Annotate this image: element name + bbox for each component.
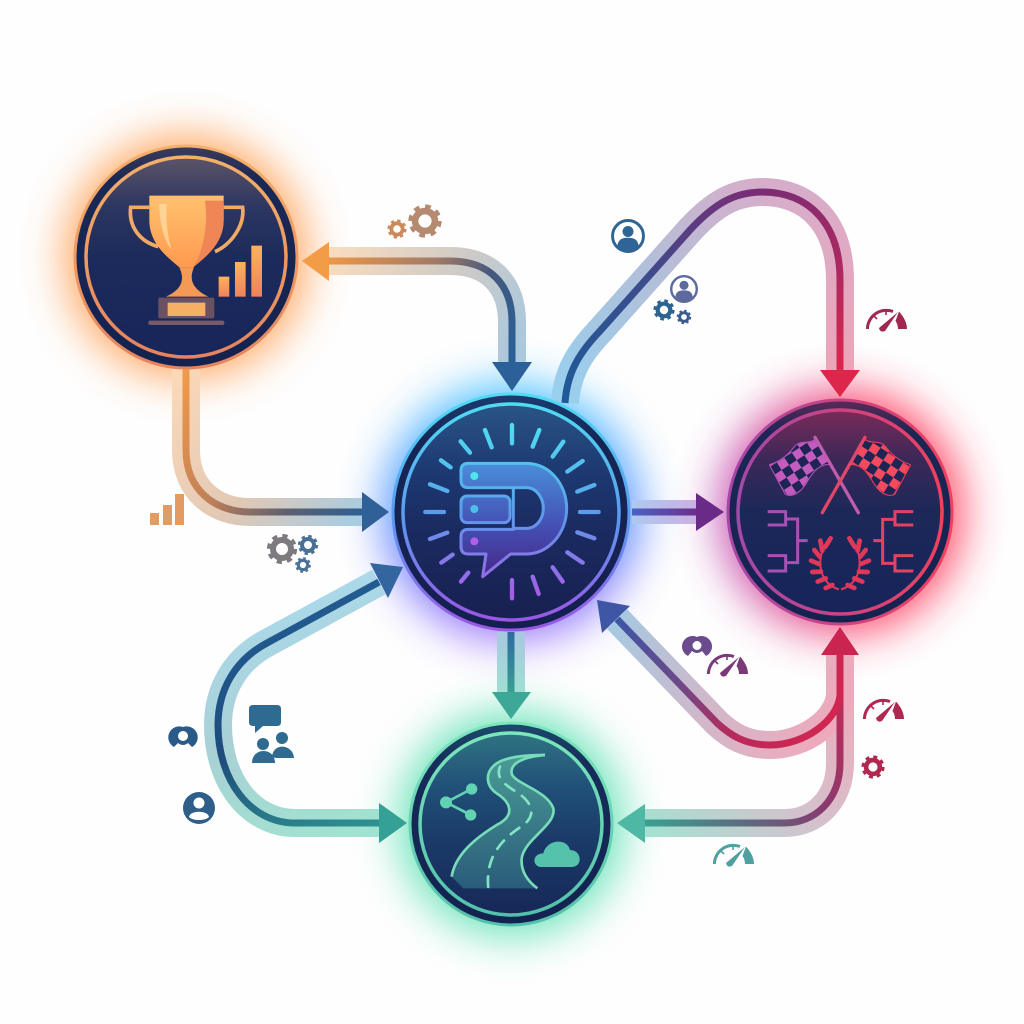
- icon: gears near upper arrow: [655, 301, 690, 323]
- icon: user and gauge near lower right arrow: [682, 636, 748, 677]
- icon: share nodes: [440, 783, 477, 821]
- icon: checkered flags, brackets, laurel: [768, 437, 913, 589]
- icon: gauge upper right: [867, 310, 907, 332]
- icon: gears above hub arrow: [389, 206, 440, 237]
- icon: bars inside trophy badge: [219, 246, 262, 297]
- arrow: hub over to racing node: [565, 192, 860, 403]
- node: road: [410, 723, 612, 925]
- icon: gauge bottom: [714, 845, 754, 867]
- glow: racing node: [718, 390, 962, 634]
- arrow: hub to trophy: [302, 242, 532, 391]
- icon: user left large: [183, 792, 215, 824]
- icon: cloud: [534, 842, 580, 867]
- node: central hub: [393, 394, 629, 630]
- icon: laurel wreath: [811, 538, 869, 589]
- arrow: hub to road node: [492, 632, 531, 719]
- node: trophy: [75, 146, 297, 368]
- icon: server speech D with rays: [425, 425, 599, 598]
- icon: user badge top: [613, 221, 643, 251]
- node: racing: [728, 400, 952, 624]
- glow: trophy node: [66, 137, 306, 377]
- icon: chat and people: [249, 705, 294, 763]
- arrow: road node loop to hub: [218, 563, 407, 843]
- icon: right bracket: [873, 512, 913, 571]
- icon: gear right side: [863, 757, 883, 777]
- icon: gears below trophy arrow: [269, 536, 317, 572]
- arrows: racing junction to road node and hub: [597, 600, 859, 843]
- icon: user left small: [168, 726, 198, 747]
- glow: hub node: [383, 384, 639, 640]
- icon: small bars: [150, 494, 184, 525]
- icon: right flag: [822, 437, 910, 513]
- arrow: trophy to hub: [186, 368, 389, 532]
- icon: left bracket: [768, 512, 808, 571]
- icon: user badge small: [671, 276, 697, 302]
- glow: road node: [399, 712, 623, 936]
- icon: gauge right side: [864, 700, 904, 722]
- icon: winding road, share, cloud: [440, 755, 580, 888]
- icon: left flag: [770, 437, 858, 513]
- icon: trophy with bars: [130, 196, 262, 325]
- arrow: hub to racing node direct: [632, 493, 724, 531]
